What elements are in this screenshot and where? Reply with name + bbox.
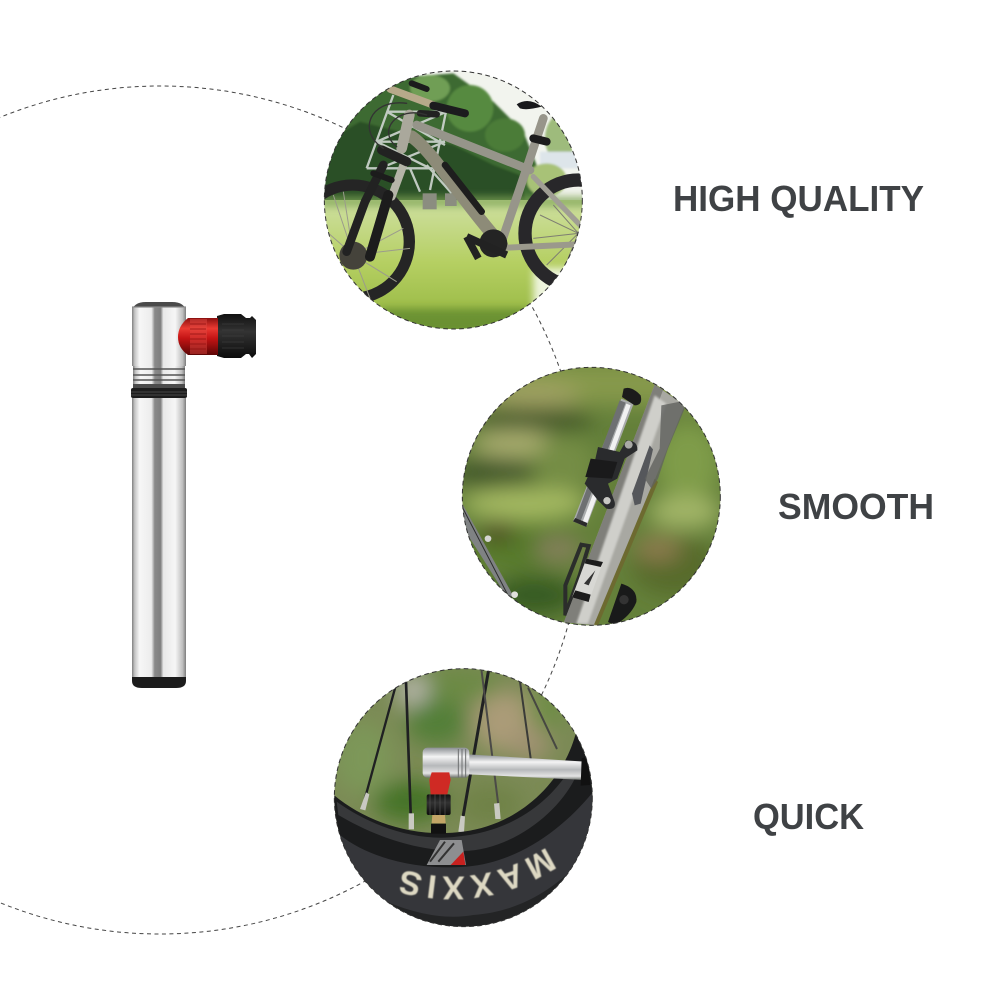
front wheel — [324, 179, 415, 300]
pump head — [132, 302, 186, 366]
valve stem — [431, 814, 446, 834]
frame — [402, 115, 580, 248]
pylon lattice — [367, 95, 452, 193]
mini pump barrel — [423, 748, 590, 786]
photo outline — [334, 669, 592, 927]
tire — [340, 793, 592, 927]
pump nozzle: black chuck — [217, 314, 256, 358]
blurred grass — [333, 668, 567, 825]
photo outline — [324, 71, 582, 329]
label: high quality: HIGH QUALITY — [673, 178, 924, 219]
spokes — [365, 672, 557, 815]
red collar — [429, 772, 451, 794]
MAXXIS tire lettering: MAXXIS — [399, 848, 556, 900]
mount clamp — [585, 440, 637, 509]
photo: pump on tire valve — [334, 668, 593, 928]
grass — [324, 200, 582, 329]
handlebar — [369, 83, 465, 148]
rear wheel — [518, 173, 582, 286]
pump barrel — [132, 398, 186, 678]
photo: bicycle on grass — [324, 70, 583, 330]
label: quick: QUICK — [753, 796, 864, 837]
rear mount black — [608, 584, 636, 625]
valve chuck — [427, 794, 451, 815]
pump nozzle: red collar — [178, 318, 218, 355]
left background tube — [462, 504, 512, 596]
mini pump barrel — [573, 399, 634, 527]
crankset — [467, 229, 507, 258]
rim — [334, 734, 592, 883]
brake bracket on tube — [632, 445, 653, 505]
rim decal — [427, 840, 466, 865]
photo: pump mounted on frame — [451, 362, 728, 632]
lower rack — [565, 545, 589, 615]
pylon footings — [423, 193, 457, 209]
label: smooth: SMOOTH — [778, 486, 934, 527]
photo outline — [462, 367, 720, 625]
trees — [320, 73, 580, 205]
frame sticker — [572, 559, 603, 602]
fork — [347, 150, 407, 257]
dashed connector circle — [0, 86, 584, 934]
pump base cap — [132, 677, 186, 688]
pump tip — [622, 388, 641, 405]
pump head rings — [133, 366, 185, 388]
black ring — [131, 388, 187, 398]
saddle — [517, 101, 542, 109]
product image: mini pump — [131, 302, 256, 688]
main silver tube — [564, 385, 685, 625]
blurred grass — [451, 362, 728, 615]
spoke nipples — [360, 792, 501, 832]
